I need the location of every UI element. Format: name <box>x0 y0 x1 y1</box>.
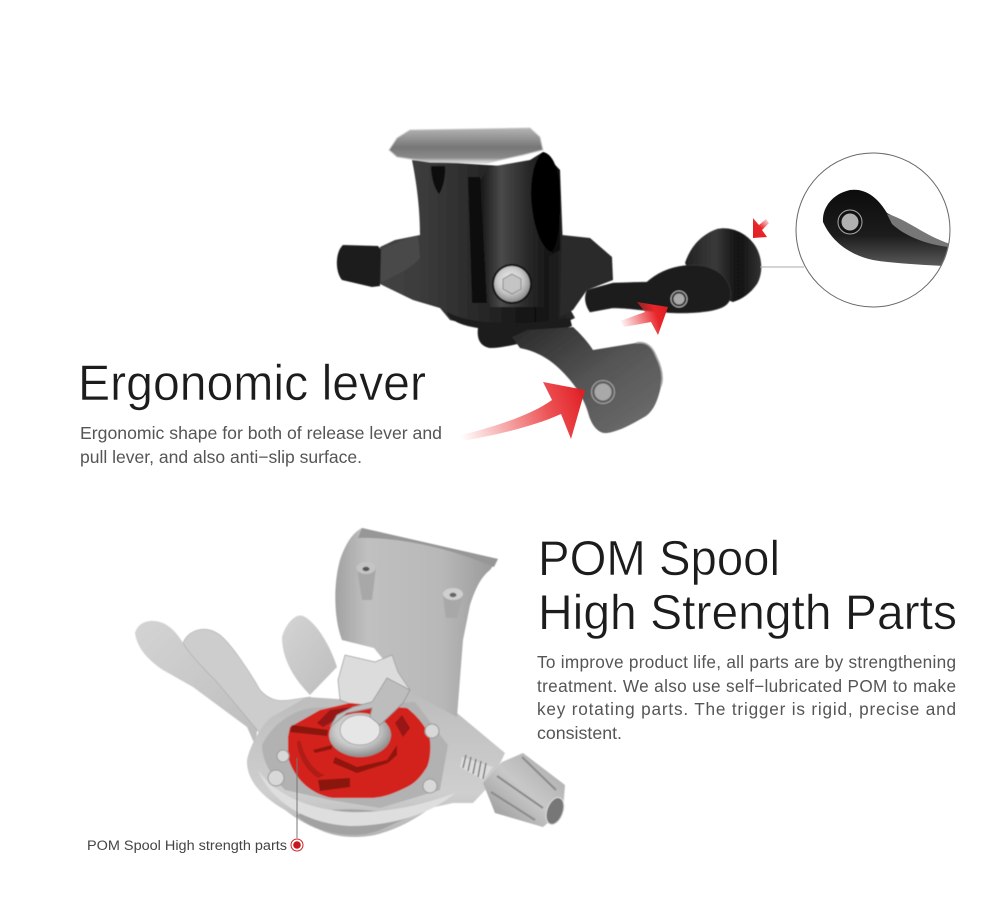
text block: ergonomic description: pull lever, and also anti−slip surface. <box>80 447 362 467</box>
lever dot <box>838 210 862 234</box>
housing lower rim <box>296 809 407 835</box>
pull lever <box>512 327 662 433</box>
leader line to detail circle <box>760 266 804 268</box>
cover top rim <box>358 528 498 567</box>
heading: Ergonomic lever: Ergonomic lever <box>78 355 426 411</box>
right finger lever <box>282 616 337 695</box>
pull lever highlight <box>636 343 662 386</box>
text block: POM description: To improve product life, all parts are by strengthening <box>537 652 956 672</box>
arrow: release lever push <box>620 302 668 335</box>
release lever rear lobe <box>685 228 761 302</box>
body slot <box>468 177 487 303</box>
heading: POM Spool High Strength Parts <box>538 532 957 640</box>
text block: ergonomic description: Ergonomic shape for both of release lever and <box>80 423 442 443</box>
callout leader line <box>296 758 298 838</box>
red POM spool <box>288 703 430 798</box>
clamp bolt <box>492 264 532 304</box>
heading: POM Spool High Strength Parts: POM Spool <box>538 532 780 586</box>
heading: POM Spool High Strength Parts: High Strength Parts <box>538 586 957 640</box>
knob hex end <box>543 795 567 827</box>
illustration: opened shifter with red spool <box>135 528 567 837</box>
clear indicator window <box>389 128 543 163</box>
right side housing <box>560 235 613 317</box>
cover peg left <box>356 562 376 600</box>
shifter body <box>378 160 575 327</box>
pull lever thumb dot <box>592 380 614 404</box>
text block: POM description: key rotating parts. The trigger is rigid, precise and <box>537 699 956 719</box>
lever profile <box>823 190 952 266</box>
housing base <box>247 690 505 837</box>
housing inner cavity <box>262 702 448 808</box>
left release lever finger <box>135 621 262 745</box>
cover peg right <box>443 588 463 618</box>
bottom inner rim <box>258 770 455 826</box>
release lever front <box>585 265 731 313</box>
text block: POM description: treatment. We also use self−lubricated POM to make <box>537 676 956 696</box>
lever upper facet <box>887 214 950 247</box>
spool centre metal bolt <box>329 713 391 757</box>
handlebar clamp <box>478 152 560 307</box>
body notch <box>431 166 445 194</box>
callout marker: red dot <box>291 839 303 851</box>
text block: ergonomic description <box>80 423 442 467</box>
rear housing highlight <box>381 236 420 282</box>
arrow: pull lever direction <box>458 382 585 441</box>
screw bosses <box>268 724 439 793</box>
cover <box>335 528 498 717</box>
release lever thumb dot <box>671 291 687 307</box>
arrow: release lever top press <box>753 218 769 238</box>
metal pawl arm <box>330 678 410 727</box>
knob ridges <box>491 757 556 820</box>
barrel knob <box>483 753 565 827</box>
metal spring bracket <box>338 655 410 715</box>
lower flange shadow <box>447 312 572 348</box>
barrel adjuster knob <box>337 245 381 287</box>
threaded barrel <box>460 755 493 780</box>
text block: POM description <box>537 652 956 743</box>
text block: POM description: consistent. <box>537 723 622 743</box>
middle finger lever <box>183 629 310 745</box>
illustration: assembled shifter with levers <box>337 128 761 433</box>
callout label: POM Spool High strength parts <box>87 838 287 854</box>
detail circle: lever profile <box>796 153 952 307</box>
clamp bore <box>531 152 560 252</box>
